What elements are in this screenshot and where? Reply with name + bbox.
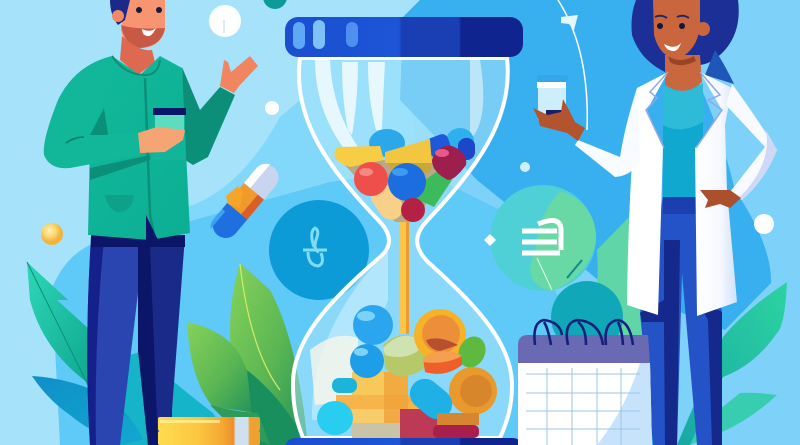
hourglass caps	[285, 17, 523, 445]
leaves: bottom right	[677, 282, 787, 445]
man pocket and hand	[153, 108, 185, 160]
woman neck	[665, 55, 702, 91]
leaves: centre left green	[187, 263, 307, 445]
woman	[533, 0, 777, 445]
woman face	[653, 0, 700, 59]
woman lab coat	[627, 72, 668, 315]
icon: coin stack	[158, 417, 260, 445]
man trousers	[87, 236, 143, 445]
top glass highlights	[315, 60, 385, 150]
glass body	[293, 58, 512, 438]
falling stream	[400, 222, 409, 334]
bottom pills	[317, 305, 497, 438]
woman trousers	[640, 197, 722, 445]
woman shirt	[663, 83, 703, 197]
man jacket	[78, 56, 190, 240]
man near arm	[44, 56, 140, 168]
woman arm with cup	[575, 88, 640, 177]
icon: floating capsule	[207, 159, 284, 243]
man head	[121, 0, 165, 48]
icon: green coin with euro symbol	[490, 185, 650, 353]
woman hair	[632, 0, 739, 72]
man neck	[120, 36, 155, 75]
man far arm and hand	[182, 67, 235, 165]
arc with star	[558, 0, 587, 130]
decorative dots and balls	[41, 0, 774, 246]
hourglass	[293, 58, 512, 438]
woman hand with cup	[533, 99, 585, 141]
cup	[537, 75, 568, 82]
man	[44, 0, 258, 445]
icon: dark teal coin with symbol	[269, 200, 369, 300]
top pills	[334, 128, 475, 224]
calendar	[518, 320, 652, 445]
woman arm on hip	[726, 84, 777, 200]
leaves: bottom left	[27, 262, 143, 445]
bottom glass highlight	[312, 250, 388, 420]
calendar rings	[534, 320, 633, 345]
